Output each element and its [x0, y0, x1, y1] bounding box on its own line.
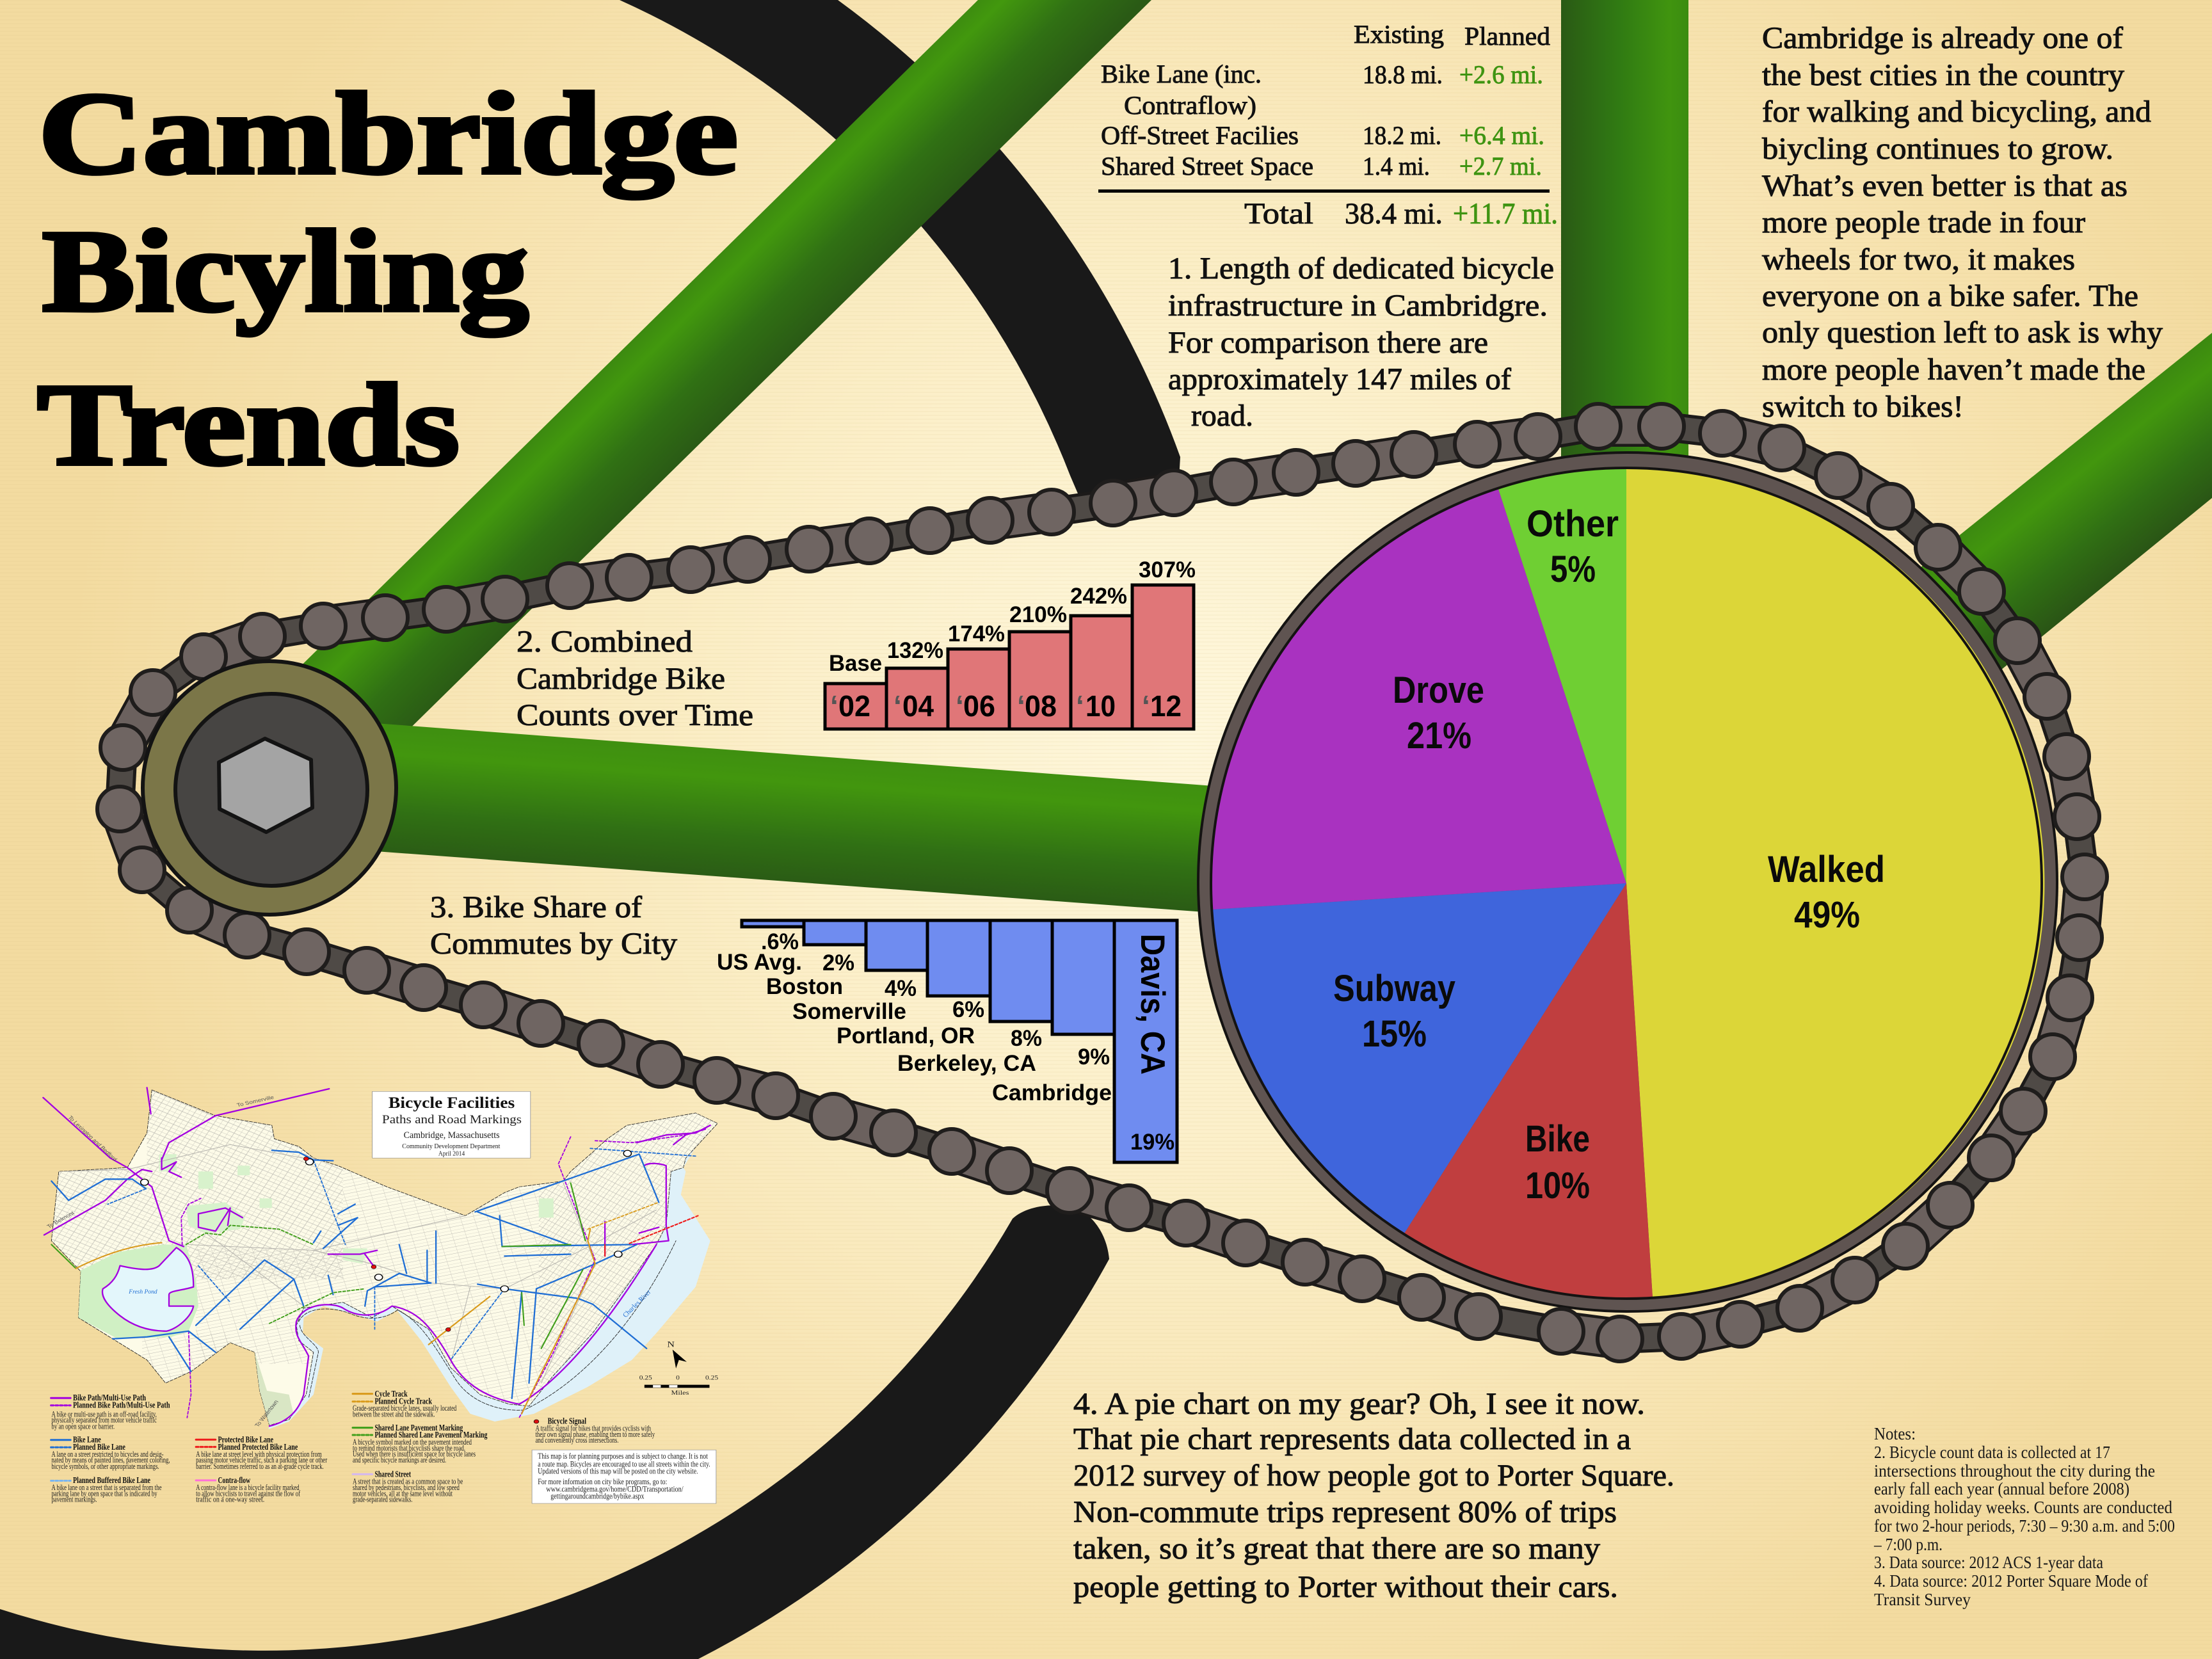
map legend: Bicycle Signal — [548, 1416, 586, 1426]
bar chart: bike counts: 12 — [1150, 689, 1182, 723]
wheel tire: lower arc — [0, 1205, 1109, 1659]
infrastructure table: Existing — [1354, 20, 1444, 49]
bar chart: commute share by city: Cambridge — [992, 1080, 1112, 1105]
text: note 3 — [430, 890, 677, 961]
map disclaimer box: a route map. Bicycles are encouraged to use all streets within the city. — [538, 1460, 710, 1469]
map disclaimer box: This map is for planning purposes and is subject to change. It is not — [538, 1452, 708, 1461]
map legend: traffic on a one-way street. — [196, 1495, 264, 1504]
map legend: bicycle symbols, or other appropriate markings. — [51, 1462, 159, 1471]
infrastructure table: +2.7 mi. — [1459, 152, 1542, 180]
slice: Drove 21% — [1212, 489, 1626, 910]
bar chart: commute share by city: Davis, CA — [1134, 934, 1171, 1075]
infrastructure table: 18.8 mi. — [1363, 60, 1443, 89]
map labels: To Watertown — [253, 1399, 280, 1428]
bar chart: commute share by city: 2% — [822, 950, 854, 975]
map legend: A bike lane on a street that is separated from the — [51, 1483, 162, 1492]
slice: Walked 49%: 49% — [1794, 894, 1860, 936]
text: intro paragraph: for walking and bicycling, and — [1762, 95, 2151, 129]
slice: Bike 10%: Bike — [1525, 1118, 1590, 1160]
map legend — [51, 1390, 655, 1504]
slice: Other 5% — [1498, 469, 1626, 883]
text: footnotes: 3. Data source: 2012 ACS 1-year data — [1874, 1553, 2103, 1572]
map labels: Charles River — [621, 1288, 653, 1318]
map legend: motor vehicles, all at the same level without — [353, 1489, 453, 1498]
map legend: Planned Protected Bike Lane — [218, 1442, 298, 1452]
map: Cambridge bicycle facilities — [43, 1087, 725, 1504]
slice: Subway 15%: Subway — [1333, 968, 1455, 1009]
map title box — [373, 1091, 531, 1158]
text: footnotes — [1873, 1424, 2175, 1609]
bar chart: bike counts: 02 — [838, 689, 870, 723]
map disclaimer box: www.cambridgema.gov/home/CDD/Transportation/ — [546, 1485, 684, 1494]
infrastructure table: Total — [1244, 197, 1313, 230]
slice: Bike 10% — [1404, 883, 1653, 1298]
map title box: April 2014 — [438, 1150, 465, 1157]
text: note 1: 1. Length of dedicated bicycle — [1168, 252, 1554, 285]
infrastructure table: 38.4 mi. — [1345, 197, 1443, 230]
map legend: Planned Shared Lane Pavement Marking — [374, 1431, 488, 1440]
map legend: between the street and the sidewalk. — [353, 1410, 435, 1419]
map legend: Contra-flow — [218, 1476, 250, 1486]
map labels: To Belmont — [45, 1210, 76, 1230]
infrastructure table: Bike Lane (inc. — [1101, 60, 1262, 88]
bar chart: commute share by city: US Avg. — [717, 950, 802, 975]
rear hub — [143, 661, 396, 915]
text: intro paragraph: only question left to ask is why — [1762, 316, 2163, 349]
text: note 4: Non-commute trips represent 80% of trips — [1073, 1495, 1617, 1529]
frame tube: right diagonal — [1895, 333, 2212, 678]
wheel tire: upper arc — [620, 0, 1180, 502]
title — [37, 68, 738, 490]
bar chart: bike counts — [825, 557, 1196, 729]
infrastructure table: 1.4 mi. — [1363, 152, 1430, 180]
infrastructure table: Contraflow) — [1124, 91, 1256, 120]
bar chart: commute share by city: 6% — [952, 997, 984, 1022]
map legend: A contra-flow lane is a bicycle facility marked — [196, 1483, 300, 1492]
text: note 4: people getting to Porter without their cars. — [1073, 1570, 1618, 1604]
map title box: Cambridge, Massachusetts — [404, 1130, 500, 1141]
text: intro paragraph: switch to bikes! — [1762, 390, 1964, 424]
bar chart: commute share by city: Berkeley, CA — [897, 1051, 1036, 1076]
map north arrow and scale: N — [667, 1340, 675, 1349]
map legend: Bike Lane — [73, 1435, 101, 1445]
title: Cambridge — [38, 68, 738, 198]
bar chart: bike counts: ‘ — [830, 689, 838, 723]
map north arrow and scale: 0.25 — [705, 1375, 718, 1381]
map title box: Community Development Department — [402, 1142, 501, 1150]
map legend: Planned Bike Lane — [73, 1442, 125, 1452]
map legend: grade-separated sidewalks. — [353, 1495, 412, 1504]
bar chart: bike counts: 307% — [1139, 557, 1196, 582]
infrastructure table: Planned — [1464, 22, 1550, 51]
slice: Subway 15% — [1212, 883, 1626, 1233]
text: note 3: Commutes by City — [430, 927, 677, 961]
text: intro paragraph: biycling continues to grow. — [1762, 132, 2113, 166]
map north arrow and scale: 0 — [676, 1375, 680, 1381]
map legend: their own signal phase, enabling them to more safely — [535, 1431, 655, 1439]
text: intro paragraph: Cambridge is already one of — [1762, 21, 2123, 55]
map: bike paths — [43, 1087, 710, 1426]
map: bike lanes — [51, 1148, 696, 1399]
map legend: Grade-separated bicycle lanes, usually located — [353, 1404, 457, 1413]
bar chart: bike counts: 06 — [963, 689, 995, 723]
text: intro paragraph: the best cities in the country — [1762, 58, 2124, 92]
text: note 2: 2. Combined — [517, 625, 693, 659]
map north arrow and scale: Miles — [671, 1390, 689, 1397]
map: shared lanes, cycle tracks, protected lanes — [51, 1183, 698, 1414]
bar chart: bike counts: ‘ — [1142, 689, 1150, 723]
infrastructure table: Shared Street Space — [1101, 152, 1313, 180]
infrastructure table: +11.7 mi. — [1453, 197, 1558, 230]
map legend: shared by pedestrians, bicyclists, and low speed — [353, 1483, 460, 1492]
bar chart: bike counts: 04 — [902, 689, 934, 723]
frame tube: middle — [358, 722, 1248, 915]
bar chart: bike counts: ‘ — [1017, 689, 1025, 723]
text: note 1 — [1168, 252, 1554, 433]
text: note 4 — [1073, 1387, 1674, 1604]
map legend: pavement markings. — [51, 1495, 97, 1504]
text: footnotes: for two 2-hour periods, 7:30 – 9:30 a.m. and 5:00 — [1874, 1516, 2175, 1535]
text: note 2 — [517, 625, 753, 732]
text: footnotes: Transit Survey — [1874, 1590, 1971, 1609]
text: intro paragraph: What’s even better is that as — [1762, 169, 2128, 203]
map legend: Shared Street — [374, 1470, 412, 1479]
bar chart: commute share by city: Boston — [766, 974, 843, 999]
bar chart: commute share by city: Portland, OR — [837, 1023, 975, 1048]
text: note 1: approximately 147 miles of — [1168, 362, 1511, 396]
slice: Drove 21%: 21% — [1407, 715, 1471, 757]
bar chart: bike counts: 08 — [1025, 689, 1057, 723]
slice: Other 5%: Other — [1527, 503, 1619, 545]
text: note 1: road. — [1191, 399, 1253, 433]
text: note 4: taken, so it’s great that there are so many — [1073, 1532, 1600, 1566]
map legend: A traffic signal for bikes that provides cyclists with — [535, 1424, 652, 1433]
map disclaimer box: For more information on city bike programs, go to: — [538, 1477, 667, 1486]
map legend: nated by means of painted lines, pavement coloring, — [51, 1456, 170, 1465]
text: note 2: Counts over Time — [517, 698, 753, 732]
map legend: to allow bicyclists to travel against the flow of — [196, 1489, 300, 1498]
text: intro paragraph: more people haven’t made the — [1762, 353, 2145, 387]
map labels — [45, 1094, 653, 1428]
map legend: Protected Bike Lane — [218, 1435, 273, 1445]
bar chart: bike counts: 132% — [887, 638, 943, 663]
map legend: Planned Cycle Track — [374, 1397, 432, 1406]
text: note 4: 2012 survey of how people got to Porter Square. — [1073, 1459, 1674, 1493]
map legend: A bike or multi-use path is an off-road facility, — [51, 1410, 157, 1419]
text: footnotes: avoiding holiday weeks. Counts are conducted — [1874, 1498, 2172, 1517]
title: Trends — [37, 360, 460, 490]
slice: Drove 21%: Drove — [1393, 669, 1484, 711]
map disclaimer box: gettingaroundcambridge/bybike.aspx — [550, 1492, 645, 1501]
text: intro paragraph — [1762, 21, 2163, 424]
infrastructure table: 18.2 mi. — [1363, 121, 1441, 150]
slice: Subway 15%: 15% — [1362, 1013, 1427, 1055]
map disclaimer box — [532, 1450, 716, 1503]
map legend: passing motor vehicle traffic, such a parking lane or other — [196, 1456, 327, 1465]
map legend: physically separated from motor vehicle traffic — [51, 1416, 157, 1425]
bar chart: commute share by city: 8% — [1011, 1026, 1042, 1051]
text: note 4: 4. A pie chart on my gear? Oh, I see it now. — [1073, 1387, 1645, 1421]
map labels: To Lexington and Bedford — [67, 1115, 118, 1162]
slice: Other 5%: 5% — [1550, 549, 1596, 590]
text: intro paragraph: wheels for two, it makes — [1762, 243, 2075, 276]
map legend: Planned Buffered Bike Lane — [73, 1476, 150, 1486]
map title box: Paths and Road Markings — [382, 1112, 522, 1126]
map legend: Planned Bike Path/Multi-Use Path — [73, 1400, 170, 1410]
text: footnotes: early fall each year (annual before 2008) — [1874, 1479, 2129, 1498]
pie outline — [1211, 468, 2042, 1299]
bar chart: bike counts: Base — [829, 651, 882, 676]
text: note 4: That pie chart represents data collected in a — [1073, 1422, 1631, 1456]
map legend: Shared Lane Pavement Marking — [374, 1423, 463, 1432]
map land and water — [49, 1087, 725, 1429]
text: footnotes: – 7:00 p.m. — [1873, 1535, 1943, 1554]
map legend: A street that is created as a common space to be — [353, 1477, 463, 1486]
bar chart: commute share by city — [717, 920, 1177, 1162]
gear ring — [1198, 453, 2057, 1311]
text: note 2: Cambridge Bike — [517, 662, 725, 696]
map labels: To Somerville — [236, 1094, 275, 1108]
bar chart: commute share by city: 4% — [885, 976, 917, 1001]
infrastructure table: +2.6 mi. — [1459, 60, 1543, 89]
bicycle chain — [97, 404, 2107, 1361]
slice: Walked 49% — [1626, 469, 2044, 1297]
infrastructure table: Off-Street Facilies — [1101, 121, 1299, 150]
infrastructure table: +6.4 mi. — [1459, 121, 1544, 150]
map legend: A lane on a street restricted to bicycles and desig- — [51, 1450, 164, 1459]
map legend: barrier. Sometimes referred to as an at-grade cycle track. — [196, 1462, 324, 1471]
bar chart: bike counts: ‘ — [956, 689, 964, 723]
infrastructure table — [1098, 20, 1558, 230]
map legend: Cycle Track — [374, 1390, 408, 1399]
bar chart: commute share by city: 9% — [1078, 1045, 1110, 1070]
text: footnotes: Notes: — [1874, 1424, 1916, 1443]
map north arrow and scale: 0.25 — [639, 1375, 652, 1381]
text: footnotes: 4. Data source: 2012 Porter Square Mode of — [1874, 1571, 2148, 1591]
bar chart: bike counts: 174% — [948, 621, 1005, 646]
map legend: and conveniently cross intersections. — [535, 1436, 619, 1445]
text: footnotes: intersections throughout the city during the — [1874, 1461, 2155, 1480]
bar chart: bike counts: 10 — [1086, 689, 1116, 723]
bar chart: bike counts: ‘ — [894, 689, 902, 723]
text: intro paragraph: everyone on a bike safer. The — [1762, 279, 2138, 313]
bar chart: bike counts: ‘ — [1076, 689, 1084, 723]
map legend: by an open space or barrier. — [51, 1422, 115, 1431]
map north arrow and scale — [639, 1340, 718, 1397]
map legend: Bike Path/Multi-Use Path — [73, 1393, 146, 1402]
text: intro paragraph: more people trade in four — [1762, 205, 2085, 239]
map legend: to remind motorists that bicyclists share the road. — [353, 1444, 465, 1453]
bar chart: commute share by city: 19% — [1130, 1130, 1174, 1155]
bar chart: bike counts: 210% — [1009, 602, 1067, 627]
text: footnotes: 2. Bicycle count data is collected at 17 — [1874, 1443, 2110, 1462]
map legend: A bicycle symbol marked on the pavement intended — [353, 1438, 472, 1447]
title: Bicyling — [42, 206, 529, 336]
map legend: A bike lane at street level with physical protection from — [196, 1450, 322, 1459]
frame tube: vertical — [1561, 0, 1688, 486]
text: note 1: For comparison there are — [1168, 326, 1488, 360]
map legend: and specific bicycle markings are desired. — [353, 1456, 446, 1465]
pie chart: mode share — [1212, 469, 2044, 1298]
map legend: Used when there is insufficient space for bicycle lanes — [353, 1450, 476, 1459]
map: stations and signals — [141, 1150, 631, 1331]
map legend: parking lane by open space that is indicated by — [51, 1489, 157, 1498]
bar chart: commute share by city: Somerville — [792, 999, 906, 1024]
map title box: Bicycle Facilities — [389, 1094, 515, 1112]
frame tube: upper diagonal — [282, 0, 1151, 748]
map labels: Fresh Pond — [128, 1288, 157, 1295]
bar chart: commute share by city: .6% — [761, 929, 799, 954]
text: note 3: 3. Bike Share of — [430, 890, 642, 924]
slice: Bike 10%: 10% — [1525, 1165, 1590, 1206]
slice: Walked 49%: Walked — [1768, 849, 1885, 890]
text: note 1: infrastructure in Cambridgre. — [1168, 289, 1548, 323]
map disclaimer box: Updated versions of this map will be posted on the city website. — [538, 1467, 698, 1476]
bar chart: bike counts: 242% — [1070, 584, 1127, 609]
